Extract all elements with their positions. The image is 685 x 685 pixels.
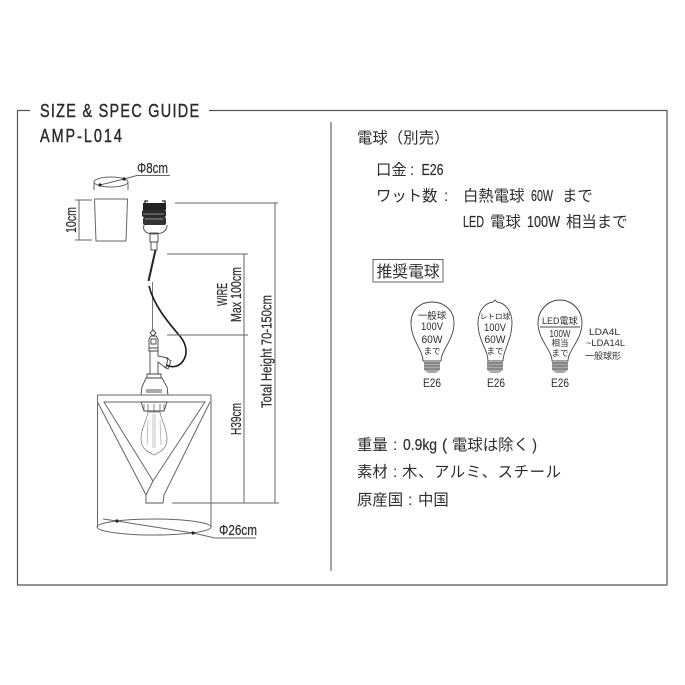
weight: ) <box>532 437 537 454</box>
weight: : <box>393 437 397 454</box>
country of origin: 原産国 <box>357 491 403 509</box>
wattage spec: 100W <box>527 214 560 231</box>
dimension: cup diameter: Φ8cm <box>137 160 168 177</box>
wattage spec: 相当まで <box>566 213 628 231</box>
dimension: shade diameter: Φ26cm <box>219 522 257 539</box>
bulb: retro: レトロ球 <box>480 311 511 321</box>
column divider <box>330 122 332 571</box>
weight: 0.9kg <box>403 437 437 454</box>
country of origin: : <box>408 492 412 509</box>
recommended bulb label: 推奨電球 <box>376 263 440 281</box>
bulb: LED: 相当 <box>551 338 569 348</box>
material: : <box>393 464 397 481</box>
lamp holder <box>141 330 171 395</box>
wattage spec: LED <box>463 214 484 231</box>
LED model note <box>585 327 625 361</box>
recommended bulb label <box>373 260 443 282</box>
wire <box>148 250 186 367</box>
bulb: standard: 60W <box>422 334 443 346</box>
LED model note: LDA4L <box>589 327 620 338</box>
wattage spec: : <box>444 188 448 205</box>
bulb section heading: 電球（別売） <box>357 129 449 147</box>
base spec: E26 <box>422 162 444 179</box>
LED model note: ~LDA14L <box>586 338 625 349</box>
country of origin: 中国 <box>418 491 449 509</box>
bulb: retro: 60W <box>484 334 506 346</box>
outer frame <box>18 110 667 585</box>
base spec: : <box>410 162 414 179</box>
dimension: shade diameter <box>103 519 257 539</box>
bulb in frame <box>141 402 167 455</box>
bulb: standard: E26 <box>423 376 441 390</box>
weight <box>357 436 537 454</box>
bulb: standard <box>411 302 454 390</box>
triangular wooden frame and shade <box>97 395 211 535</box>
wattage spec <box>376 187 628 231</box>
bulb: standard: まで <box>423 346 441 356</box>
bulb: retro: 100V <box>484 322 507 334</box>
bulb: retro <box>478 300 512 390</box>
ceiling socket <box>142 201 167 250</box>
weight: 電球は除く <box>452 436 529 454</box>
bulb: LED: まで <box>551 348 569 358</box>
weight: 重量 <box>357 436 388 454</box>
dimension: wire: WIRE <box>214 283 231 306</box>
dimension: wire: Max 100cm <box>228 267 245 322</box>
model name: AMP-L014 <box>40 125 122 146</box>
dimension: cup height: 10cm <box>63 207 80 233</box>
shade bottom ellipse <box>97 519 211 535</box>
material: 素材 <box>357 463 388 481</box>
country of origin <box>357 491 449 509</box>
bulb: LED: 100W <box>550 328 571 340</box>
wattage spec: 60W <box>531 188 553 205</box>
bulb: LED: E26 <box>551 376 569 390</box>
wattage spec: 電球 <box>490 213 521 231</box>
bulb: LED: LED電球 <box>542 315 578 326</box>
bulb: LED <box>538 300 582 390</box>
bulb: standard: 100V <box>421 321 444 333</box>
dimension: total height <box>175 203 278 503</box>
dimension: lamp height: H39cm <box>228 403 245 435</box>
dimension: lamp height <box>172 335 279 503</box>
title: SIZE & SPEC GUIDE <box>40 100 199 121</box>
weight: ( <box>442 437 448 454</box>
bulb: retro: まで <box>486 346 504 356</box>
bulb: standard: 一般球 <box>418 310 447 322</box>
wattage spec: 白熱電球 <box>463 187 525 205</box>
wattage spec: まで <box>562 188 593 205</box>
LED model note: 一般球形 <box>585 350 621 361</box>
base spec <box>376 161 444 179</box>
material: 木、アルミ、スチール <box>402 463 561 481</box>
wattage spec: ワット数 <box>376 187 438 205</box>
dimension: wire <box>167 254 248 335</box>
bulb: retro: E26 <box>487 376 505 390</box>
base spec: 口金 <box>376 161 407 179</box>
shade cup diagram <box>63 160 170 241</box>
dimension: total height: Total Height 70-150cm <box>258 295 276 408</box>
